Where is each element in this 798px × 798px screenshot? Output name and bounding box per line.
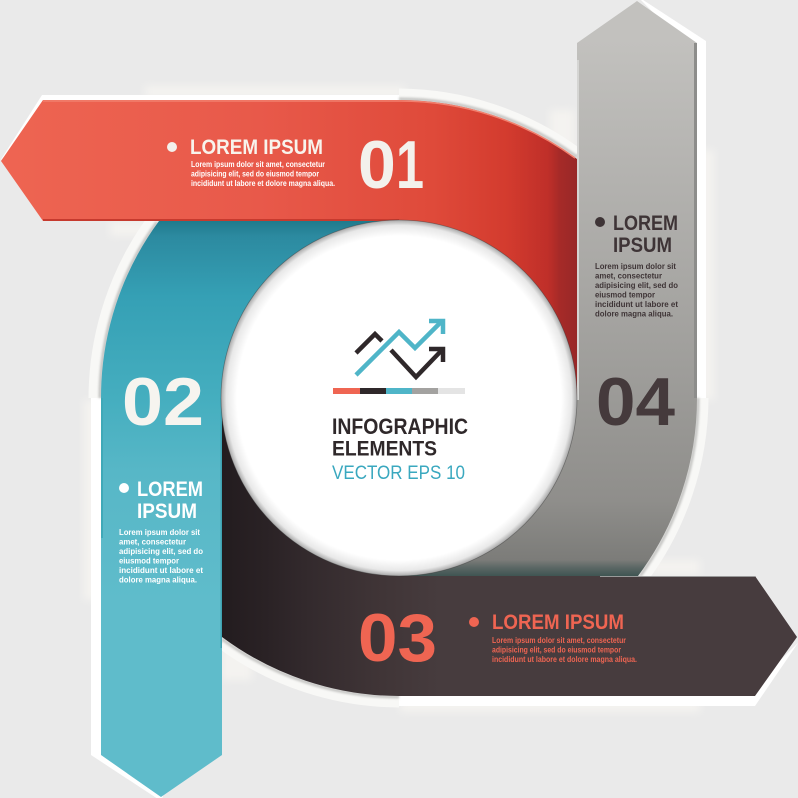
text block: 02: dolore magna aliqua. — [119, 576, 197, 584]
text block: 01: 1 — [396, 127, 424, 203]
icon: trend arrows — [356, 321, 443, 377]
text block: 04: LOREM — [613, 212, 678, 235]
text block: 04: adipisicing elit, sed do — [595, 281, 678, 290]
central white circle — [221, 220, 577, 576]
title: VECTOR EPS 10 — [332, 463, 465, 484]
text block: 04: dolore magna aliqua. — [595, 310, 673, 318]
text block: 04: IPSUM — [613, 234, 672, 257]
text block: 01: 0 — [358, 127, 396, 203]
text block: 02: eiusmod tempor — [119, 556, 179, 566]
colour bar — [333, 388, 465, 394]
text block: 01: adipisicing elit, sed do eiusmod tempor — [191, 170, 319, 178]
text block: 03: incididunt ut labore et dolore magna aliqua. — [492, 655, 637, 664]
text block: 04: amet, consectetur — [595, 272, 662, 280]
title: ELEMENTS — [332, 438, 437, 460]
panel: 01 red ribbon — [1, 100, 577, 398]
text block: 03: adipisicing elit, sed do eiusmod tempor — [492, 646, 621, 654]
text block: 02: LOREM — [137, 478, 203, 501]
text block: 03 — [358, 600, 637, 676]
text block: 01: LOREM IPSUM — [190, 136, 323, 159]
text block: 02 — [119, 364, 204, 584]
text block: 02: incididunt ut labore et — [119, 566, 203, 575]
text block: 02: adipisicing elit, sed do — [119, 547, 203, 556]
text block: 03: LOREM IPSUM — [492, 611, 624, 634]
text block: 02: IPSUM — [137, 500, 197, 523]
panel: 04 gray ribbon — [399, 1, 697, 576]
text block: 04 — [595, 212, 678, 440]
text block: 03: 03 — [358, 600, 437, 676]
text block: 04: eiusmod tempor — [595, 290, 655, 300]
title: INFOGRAPHIC — [332, 414, 468, 439]
soft shadow patches — [84, 86, 714, 712]
text block: 01 — [167, 127, 424, 203]
panel: 03 dark ribbon — [222, 398, 797, 696]
text block: 01: Lorem ipsum dolor sit amet, consectetur — [191, 160, 325, 169]
panel: 02 teal ribbon — [101, 221, 399, 797]
text block: 01: incididunt ut labore et dolore magna aliqua. — [191, 179, 335, 188]
text block: 04: 04 — [596, 364, 675, 440]
text block: 02: 02 — [122, 364, 204, 440]
title — [332, 414, 468, 484]
text block: 04: incididunt ut labore et — [595, 300, 678, 309]
text block: 03: Lorem ipsum dolor sit amet, consectetur — [492, 636, 626, 645]
text block: 04: Lorem ipsum dolor sit — [595, 262, 676, 271]
text block: 02: amet, consectetur — [119, 538, 186, 546]
text block: 02: Lorem ipsum dolor sit — [119, 528, 200, 537]
